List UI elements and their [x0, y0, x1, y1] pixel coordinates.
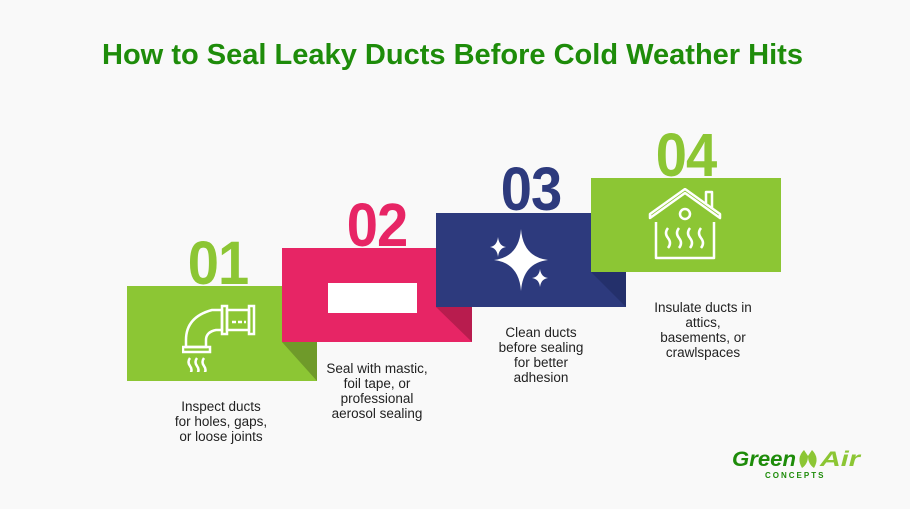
step 4 text: crawlspaces	[666, 345, 740, 360]
step 3 fold	[436, 307, 472, 342]
step 1 text: for holes, gaps,	[175, 414, 267, 429]
step 3 text: Clean ducts	[505, 325, 577, 340]
step 4 text: basements, or	[660, 330, 746, 345]
step 4 text: attics,	[685, 315, 721, 330]
step 2 text: foil tape, or	[344, 376, 410, 391]
step 2 text: aerosol sealing	[332, 406, 422, 421]
step 3 text	[499, 325, 583, 385]
logo: Green	[732, 448, 796, 471]
step 3 text: adhesion	[514, 370, 568, 385]
icon: heated house	[648, 188, 722, 260]
icon: pipe leak	[182, 304, 256, 372]
step 3 number: 03	[501, 155, 561, 223]
step 1 text: or loose joints	[179, 429, 263, 444]
step 1 text: Inspect ducts	[181, 399, 261, 414]
step 2 text: Seal with mastic,	[326, 361, 428, 376]
step 4 number: 04	[656, 121, 716, 189]
step 2 number: 02	[347, 191, 407, 259]
step 3 text: before sealing	[499, 340, 583, 355]
step 4 text: Insulate ducts in	[654, 300, 752, 315]
step 3 text: for better	[514, 355, 568, 370]
step 2 fold	[282, 342, 317, 381]
step 1 panel	[127, 286, 317, 381]
step 3 panel	[436, 213, 626, 307]
logo: Air	[819, 448, 862, 471]
step 2 panel	[282, 248, 472, 342]
logo	[732, 448, 862, 480]
icon: sparkles	[490, 229, 548, 291]
step 4 fold	[591, 272, 626, 307]
step 4 panel	[591, 178, 781, 272]
step 1 number: 01	[188, 229, 248, 297]
logo: CONCEPTS	[765, 471, 825, 480]
step 4 text	[654, 300, 752, 360]
icon: tape	[328, 283, 417, 313]
title: How to Seal Leaky Ducts Before Cold Weather Hits	[102, 39, 803, 71]
step 2 text: professional	[341, 391, 413, 406]
step 1 text	[175, 399, 267, 444]
step 2 text	[326, 361, 428, 421]
